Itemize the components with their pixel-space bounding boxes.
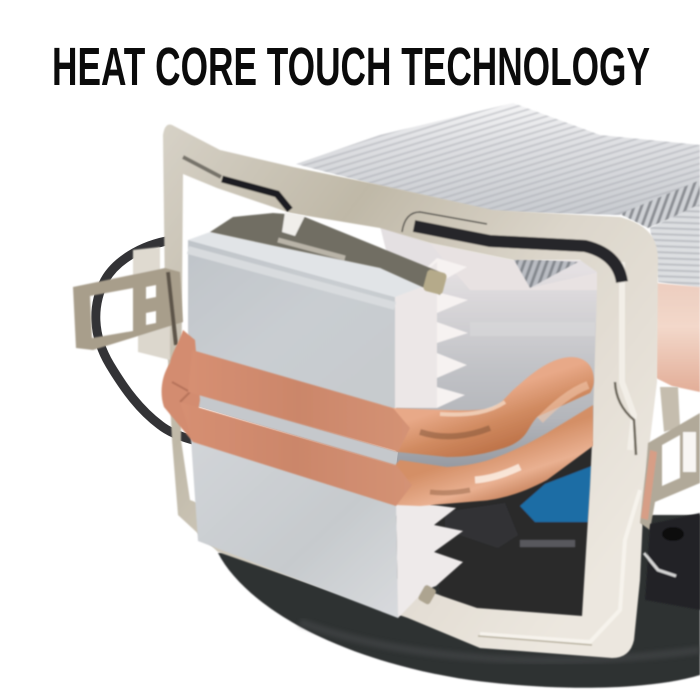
clip end pin bbox=[422, 269, 448, 295]
heat pipes bbox=[162, 330, 594, 506]
cable bbox=[96, 240, 193, 440]
lower clip pin bbox=[417, 584, 437, 605]
fan base bbox=[218, 515, 700, 688]
frame fold highlight bbox=[480, 490, 640, 642]
lower tube bbox=[396, 405, 593, 506]
interior fin stack bbox=[380, 226, 600, 480]
block front face bbox=[188, 240, 395, 410]
fold slot bbox=[615, 382, 636, 455]
right fan housing bbox=[644, 513, 700, 610]
fan interior bbox=[430, 440, 596, 620]
lower aluminium block bbox=[190, 425, 463, 618]
aluminium strip between pipes bbox=[190, 390, 398, 466]
tube highlights bbox=[420, 428, 490, 436]
upper tube bbox=[393, 357, 594, 457]
side fins bbox=[650, 204, 700, 288]
upper aluminium block bbox=[188, 232, 468, 410]
fin teeth edge bbox=[620, 180, 700, 228]
block top strip bbox=[188, 232, 440, 297]
heatsink top fins bbox=[296, 103, 700, 288]
frame slot right bbox=[414, 226, 622, 282]
pipe bend left bbox=[162, 330, 200, 442]
lower copper flat bbox=[180, 402, 412, 506]
mounting bracket frame bbox=[163, 124, 658, 658]
frame slot left bbox=[183, 157, 221, 177]
spring clip bbox=[210, 212, 448, 295]
fan blue hub bbox=[520, 466, 592, 522]
upper copper flat bbox=[188, 350, 410, 452]
right clip bbox=[640, 387, 700, 530]
block side with fins bbox=[395, 258, 468, 408]
left clip bbox=[73, 247, 183, 360]
copper pipe behind frame bbox=[656, 283, 700, 392]
